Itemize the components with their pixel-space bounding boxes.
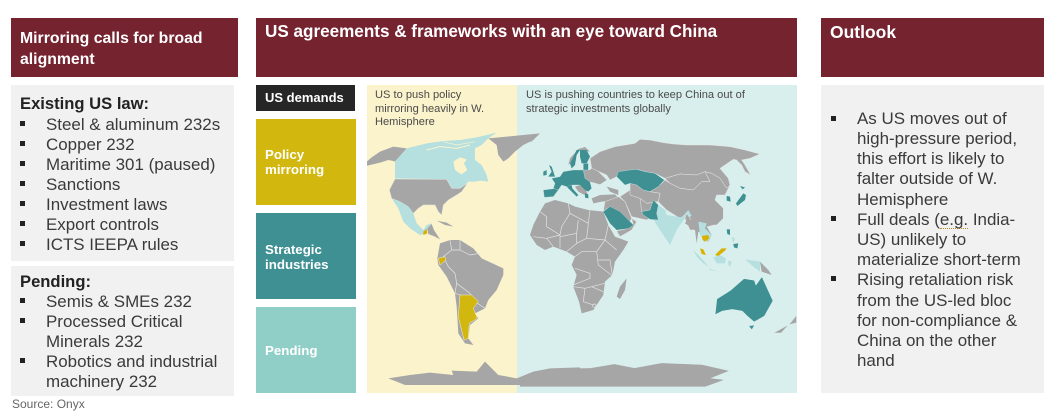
map caption: eastern hemisphere [526,89,745,115]
outlook header [821,18,1044,77]
map: Europe [525,139,620,203]
panel: outlook: from the US-led bloc [857,291,1011,310]
map: Oceania and east Antarctica [520,277,796,387]
legend: policy mirroring: mirroring [265,162,324,177]
panel: pending laws: Semis & SMEs 232 [46,292,192,311]
panel: outlook: hand [857,351,895,370]
middle header: US agreements & frameworks with an eye toward China [265,22,717,41]
panel: pending laws: Minerals 232 [46,332,143,351]
panel: outlook: As US moves out of [857,109,1007,128]
map: South America and west Antarctica [388,240,580,385]
map caption: western hemisphere: Hemisphere [375,116,435,128]
panel: existing US law: Steel & aluminum 232s [46,115,220,134]
panel: outlook: e.g. [940,210,968,229]
legend heading: US demands [256,85,355,111]
left header: alignment [20,51,95,68]
legend: policy mirroring: Policy [265,147,304,162]
panel: outlook: high-pressure period, [857,129,1017,148]
map caption: western hemisphere: US to push policy [375,89,461,101]
panel: outlook: Rising retaliation risk [857,270,1013,289]
legend: policy mirroring [256,119,356,205]
panel: existing US law: Sanctions [46,175,120,194]
map: Southeast Asia [685,220,772,275]
panel: existing US law: Maritime 301 (paused) [46,155,215,174]
panel: existing US law [11,85,234,261]
panel: outlook: Hemisphere [857,190,948,209]
left header: Mirroring calls for broad [20,30,203,47]
panel: outlook: US) unlikely to [857,230,966,249]
source note: Source: Onyx [12,397,85,411]
panel: outlook: this effort is likely to [857,149,1004,168]
legend: strategic industries: Strategic [265,242,322,257]
map: Asia [590,139,760,245]
panel: existing US law: Investment laws [46,195,167,214]
eastern hemisphere background [517,85,797,393]
panel: existing US law: Export controls [46,215,159,234]
legend heading: US demands: US demands [265,90,344,105]
panel: outlook: for non-compliance & [857,311,1017,330]
panel: outlook: falter outside of W. [857,169,997,188]
map caption: western hemisphere [375,89,484,128]
map: Africa and Arabia [530,197,637,313]
panel: pending laws: Processed Critical [46,312,182,331]
western hemisphere background [367,85,517,393]
map caption: eastern hemisphere: strategic investments globally [526,103,671,115]
panel: existing US law: Copper 232 [46,135,135,154]
map caption: western hemisphere: mirroring heavily in W. [375,103,484,115]
panel: pending laws: machinery 232 [46,372,157,391]
map: North America [360,133,540,239]
outlook header: Outlook [830,22,896,42]
panel: outlook: Full deals ( India- [857,210,1015,229]
legend: strategic industries [256,213,356,299]
panel: existing US law: ICTS IEEPA rules [46,235,178,254]
legend: pending: Pending [265,343,317,358]
legend: strategic industries: industries [265,257,329,272]
world map panel [367,85,797,393]
panel: pending laws [11,266,234,396]
panel: outlook: materialize short-term [857,250,1021,269]
panel: outlook [821,85,1044,393]
panel: pending laws: Robotics and industrial [46,352,217,371]
panel: existing US law: Existing US law: [20,94,149,113]
panel: outlook: China on the other [857,331,996,350]
panel: pending laws: Pending: [20,272,91,291]
legend: pending [256,307,356,393]
map caption: eastern hemisphere: US is pushing countries to keep China out of [526,89,745,101]
middle header [256,18,797,77]
left header [11,18,238,77]
